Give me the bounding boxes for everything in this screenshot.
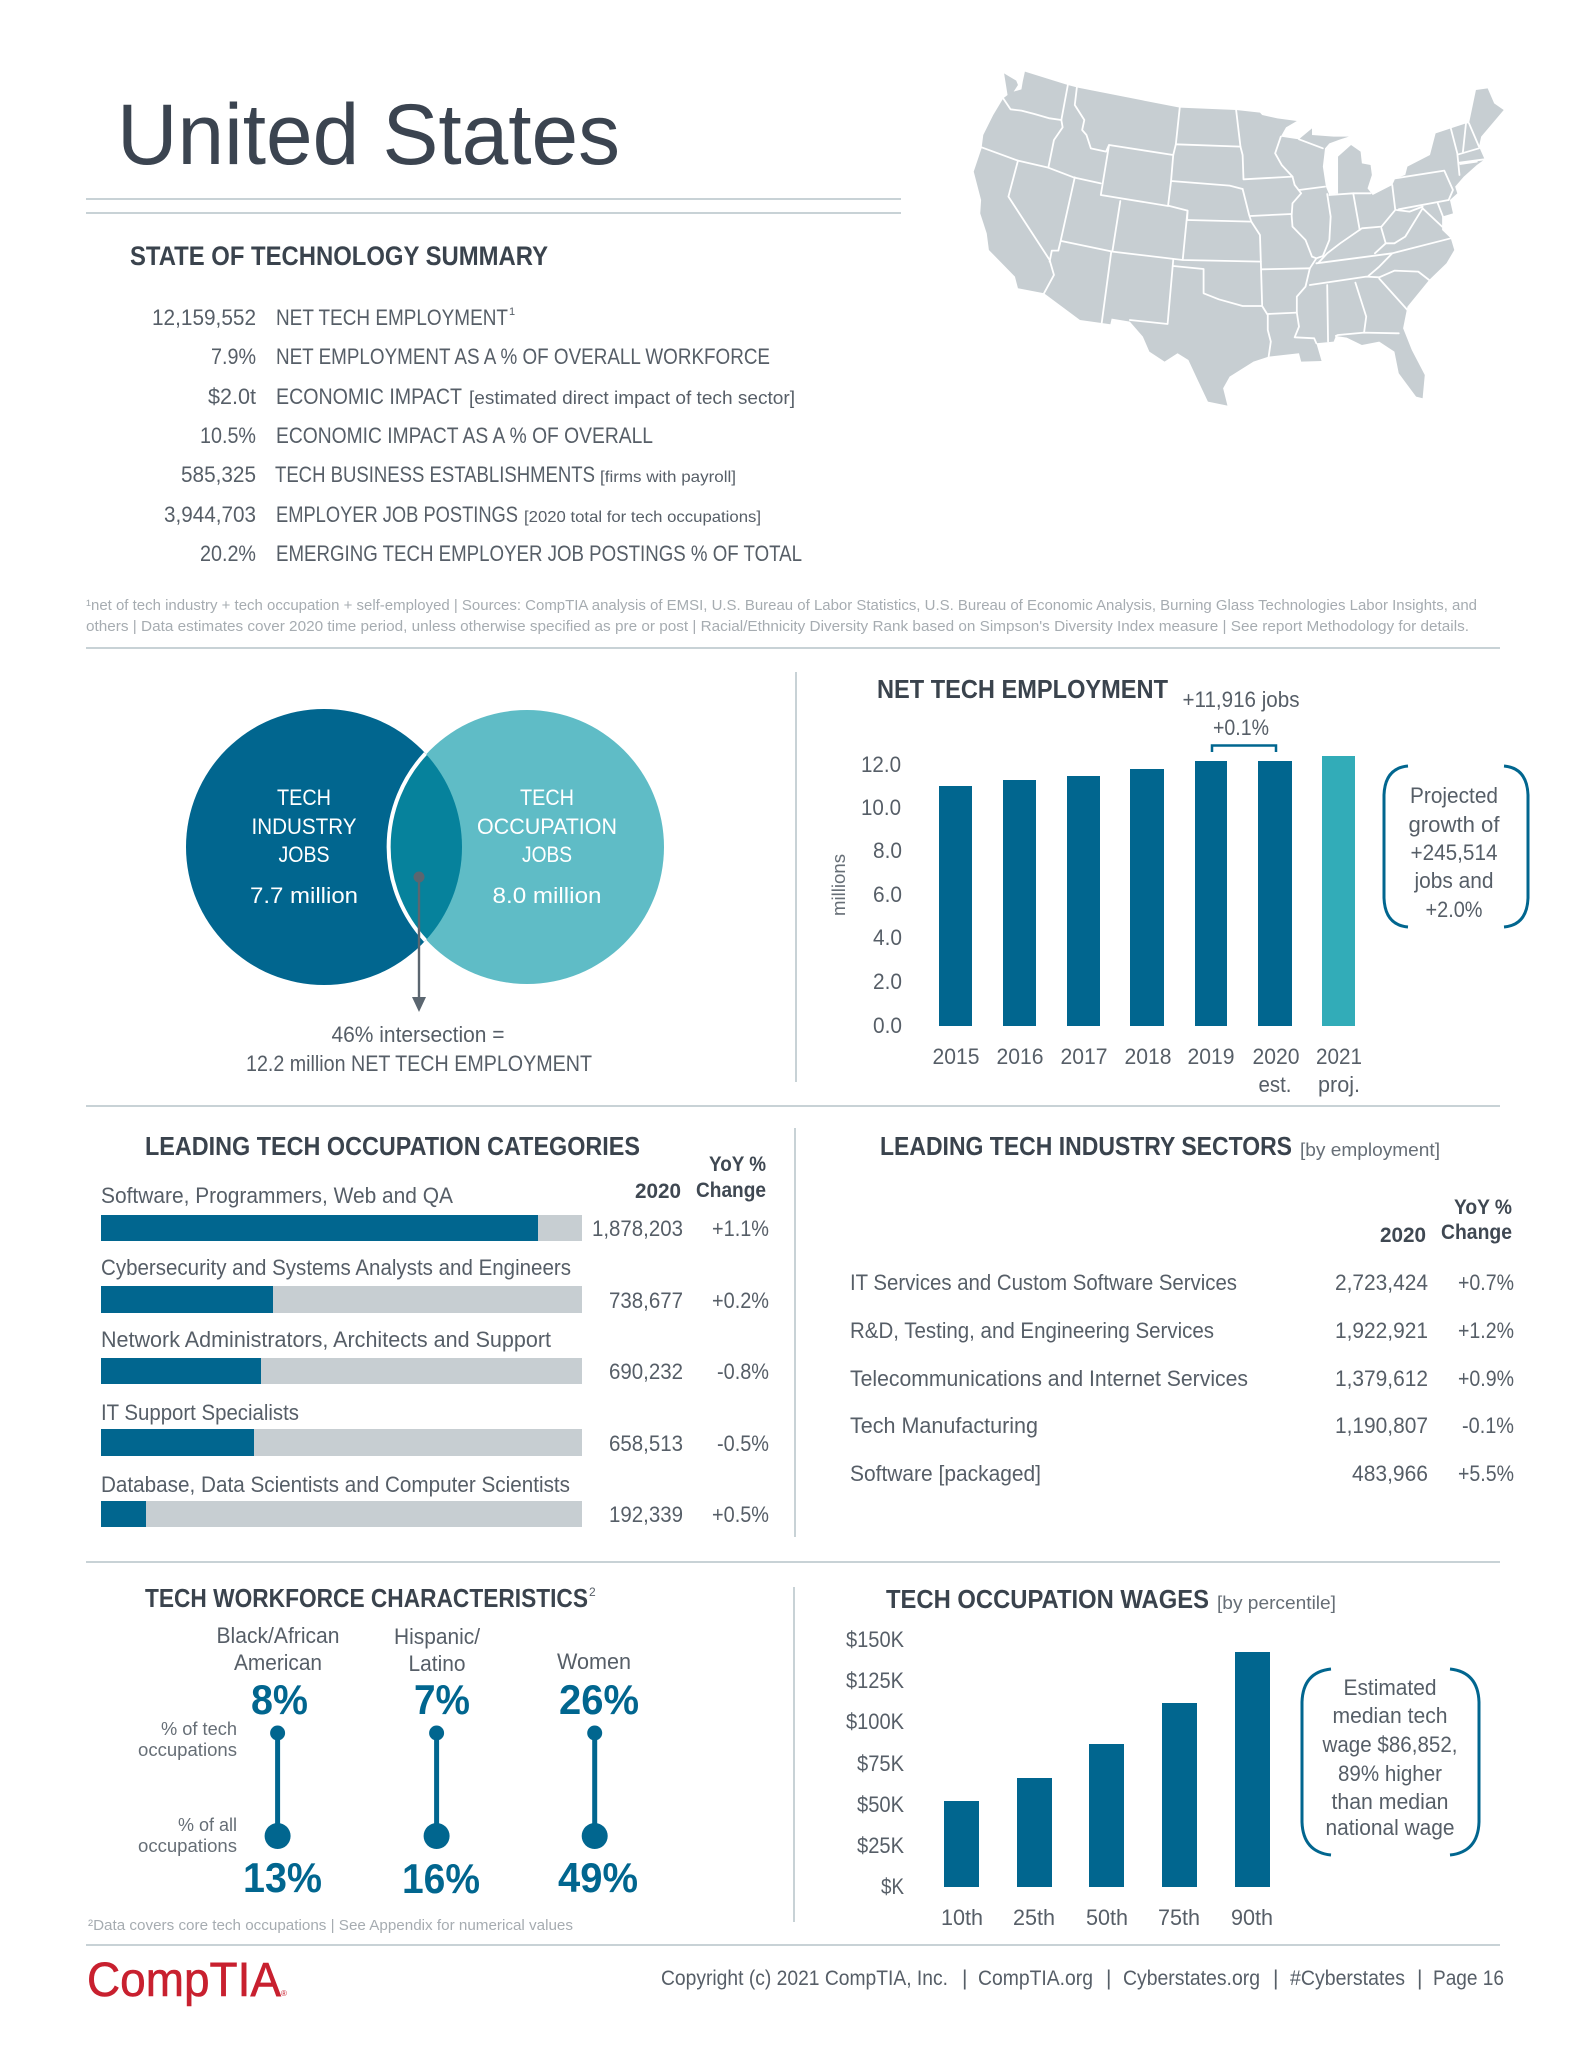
callout: median wage (1302, 1669, 1479, 1855)
x axis: 2015 (932, 1044, 980, 1069)
sector rows: -0.1% (1462, 1413, 1514, 1438)
sector rows: +0.9% (1458, 1366, 1514, 1391)
summary stats list: 12,159,552 (152, 305, 256, 330)
lollipop: hispanic/latino (402, 1676, 480, 1902)
summary stats list (152, 305, 802, 566)
row: network: Network Administrators, Architects and Support (101, 1327, 551, 1352)
column labels: Hispanic/ (394, 1624, 481, 1649)
lollipop: women: 26% (559, 1676, 639, 1723)
footer: copyright: CompTIA.org (978, 1967, 1093, 1990)
callout: median wage: 89% higher (1338, 1761, 1442, 1786)
lollipop: hispanic/latino: 16% (402, 1855, 480, 1902)
sector rows: 1,190,807 (1335, 1413, 1428, 1438)
x axis: 2021 (1316, 1044, 1362, 1069)
heading: workforce characteristics: 2 (589, 1585, 596, 1599)
row: database (101, 1472, 769, 1527)
callout: projected growth: +2.0% (1426, 897, 1482, 922)
footnote: sources (86, 597, 1477, 635)
x axis: 2019 (1188, 1044, 1234, 1069)
x axis (932, 1044, 1362, 1097)
row: cybersecurity: +0.2% (712, 1288, 769, 1313)
row: software: Software, Programmers, Web and QA (101, 1183, 453, 1208)
y axis: 10.0 (861, 795, 901, 820)
row: software (101, 1183, 769, 1241)
summary stats list: 10.5% (200, 423, 256, 448)
x axis: 2018 (1124, 1044, 1172, 1069)
footer: copyright (661, 1967, 1504, 1990)
summary stats list: TECH BUSINESS ESTABLISHMENTS (275, 462, 595, 487)
column labels (216, 1623, 631, 1676)
row: network: 690,232 (609, 1359, 683, 1384)
summary stats list: 20.2% (200, 541, 256, 566)
x axis: 2017 (1060, 1044, 1108, 1069)
column labels: Women (557, 1649, 631, 1674)
x axis: est. (1258, 1072, 1292, 1097)
row: network (101, 1327, 769, 1384)
row: it support: IT Support Specialists (101, 1400, 299, 1425)
y axis: $150K (846, 1627, 904, 1652)
panel: tech occupation wages (846, 1584, 1479, 1930)
y axis: 6.0 (873, 882, 902, 907)
bar chart (944, 1652, 1270, 1887)
summary stats list: $2.0t (208, 384, 256, 409)
intersection caption: 46% intersection = (332, 1022, 504, 1047)
sector rows: 483,966 (1352, 1461, 1428, 1486)
row: software: +1.1% (712, 1216, 769, 1241)
row: database: Database, Data Scientists and Computer Scientists (101, 1472, 570, 1497)
logo: CompTIA: ® (281, 1989, 287, 1998)
callout: projected growth: growth of (1408, 812, 1500, 837)
footnote: sources: ¹net of tech industry + tech occupation + self-employed | Sources: CompTIA analysis of EMSI, U.S. Bureau of Labor Statistics, U.S. Bureau of Economic Analysis, Burning Glass Technologies Labor Insights, and (86, 597, 1477, 614)
heading: net tech employment: NET TECH EMPLOYMENT (877, 674, 1168, 704)
summary stats list: ECONOMIC IMPACT (276, 384, 462, 409)
heading: occupation wages: [by percentile] (1217, 1593, 1336, 1613)
y axis: $K (881, 1874, 904, 1899)
x axis: proj. (1318, 1072, 1360, 1097)
y axis: $125K (846, 1668, 904, 1693)
sector rows: IT Services and Custom Software Services (850, 1270, 1237, 1295)
summary stats list: ECONOMIC IMPACT AS A % OF OVERALL (276, 423, 653, 448)
column headers (1380, 1196, 1512, 1247)
panel: leading tech occupation categories (101, 1131, 769, 1527)
x axis (941, 1905, 1273, 1930)
venn diagram: TECH (277, 785, 331, 810)
y axis: 12.0 (861, 752, 901, 777)
row labels: occupations (138, 1740, 237, 1760)
y axis: 2.0 (873, 969, 902, 994)
column headers: YoY % (709, 1153, 766, 1176)
heading: occupation categories: LEADING TECH OCCUPATION CATEGORIES (145, 1131, 640, 1161)
sector rows: +0.7% (1458, 1270, 1514, 1295)
callout: median wage: median tech (1332, 1703, 1448, 1728)
callout: median wage: than median (1332, 1789, 1448, 1814)
summary stats list: 585,325 (181, 462, 256, 487)
sector rows: R&D, Testing, and Engineering Services (850, 1318, 1214, 1343)
x axis: 75th (1158, 1905, 1200, 1930)
footer: copyright: Copyright (c) 2021 CompTIA, Inc. (661, 1967, 948, 1990)
annotation: yearly change: +0.1% (1213, 715, 1269, 740)
panel: leading tech industry sectors (850, 1131, 1514, 1486)
column headers: 2020 (635, 1180, 681, 1203)
footer: copyright: Cyberstates.org (1123, 1967, 1260, 1990)
venn diagram (186, 709, 664, 985)
column labels: Black/African (216, 1623, 340, 1648)
venn diagram: 8.0 million (492, 883, 602, 908)
y axis: $100K (846, 1709, 904, 1734)
sector rows (850, 1270, 1514, 1486)
venn diagram: INDUSTRY (252, 814, 357, 839)
intersection caption (246, 1022, 592, 1076)
callout: median wage: national wage (1326, 1815, 1454, 1840)
row: database: 192,339 (609, 1502, 683, 1527)
row: it support: -0.5% (717, 1431, 769, 1456)
footer: copyright: | (1273, 1967, 1278, 1990)
column headers: YoY % (1454, 1196, 1512, 1219)
y axis: 0.0 (873, 1013, 902, 1038)
venn diagram: JOBS (522, 842, 572, 867)
lollipop: hispanic/latino: 7% (414, 1676, 470, 1723)
footer: copyright: Page 16 (1433, 1967, 1504, 1990)
callout: projected growth: jobs and (1414, 868, 1494, 893)
summary stats list: 1 (509, 306, 515, 318)
callout: median wage: wage $86,852, (1322, 1732, 1458, 1757)
x axis: 10th (941, 1905, 983, 1930)
y axis: $50K (857, 1792, 904, 1817)
sector rows: Tech Manufacturing (850, 1413, 1038, 1438)
row labels: % of all (178, 1815, 237, 1835)
x axis: 2016 (996, 1044, 1044, 1069)
footer: copyright: | (1417, 1967, 1422, 1990)
summary stats list: [estimated direct impact of tech sector] (469, 388, 795, 408)
y axis: millions (829, 854, 849, 916)
sector rows: Telecommunications and Internet Services (850, 1366, 1248, 1391)
y axis: $25K (857, 1833, 904, 1858)
summary stats list: 3,944,703 (164, 502, 256, 527)
row: software: 1,878,203 (592, 1216, 683, 1241)
row: cybersecurity: Cybersecurity and Systems Analysts and Engineers (101, 1255, 571, 1280)
summary stats list: [2020 total for tech occupations] (524, 509, 761, 526)
lollipop: women (558, 1676, 639, 1901)
lollipop: black/african american (243, 1676, 322, 1901)
lollipop: women: 49% (558, 1854, 638, 1901)
footnote: data coverage: ²Data covers core tech occupations | See Appendix for numerical values (88, 1917, 573, 1934)
row: database: +0.5% (712, 1502, 769, 1527)
heading: occupation wages: TECH OCCUPATION WAGES (886, 1584, 1209, 1614)
heading: workforce characteristics: TECH WORKFORCE CHARACTERISTICS (145, 1583, 588, 1613)
y axis: 4.0 (873, 925, 902, 950)
row: network: -0.8% (717, 1359, 769, 1384)
annotation: yearly change: +11,916 jobs (1182, 687, 1300, 712)
summary stats list: EMERGING TECH EMPLOYER JOB POSTINGS % OF TOTAL (276, 541, 802, 566)
logo: CompTIA: CompTIA (87, 1954, 281, 2007)
y axis (846, 1627, 904, 1899)
y axis: $75K (857, 1751, 904, 1776)
heading: industry sectors: LEADING TECH INDUSTRY SECTORS (880, 1131, 1292, 1161)
sector rows: +5.5% (1458, 1461, 1514, 1486)
sector rows: +1.2% (1458, 1318, 1514, 1343)
panel: net tech employment (829, 674, 1528, 1097)
venn diagram: OCCUPATION (477, 814, 617, 839)
x axis: 90th (1231, 1905, 1273, 1930)
lollipop: black/african american: 13% (243, 1854, 322, 1901)
row labels: occupations (138, 1836, 237, 1856)
heading: industry sectors: [by employment] (1300, 1140, 1440, 1160)
heading: state of technology summary: STATE OF TECHNOLOGY SUMMARY (130, 241, 548, 271)
callout: projected growth: Projected (1410, 783, 1498, 808)
arrow: intersection (412, 872, 426, 1012)
lollipop: black/african american: 8% (251, 1676, 308, 1723)
summary stats list: NET EMPLOYMENT AS A % OF OVERALL WORKFORCE (276, 344, 770, 369)
footer: copyright: | (1106, 1967, 1111, 1990)
summary stats list: [firms with payroll] (600, 469, 736, 486)
summary stats list: 7.9% (211, 344, 256, 369)
x axis: 25th (1013, 1905, 1055, 1930)
title: United States (117, 87, 620, 183)
row: cybersecurity (101, 1255, 769, 1313)
column headers (635, 1153, 766, 1203)
map: contiguous United States (974, 72, 1504, 406)
row labels: % of tech (161, 1719, 237, 1739)
row: it support: 658,513 (609, 1431, 683, 1456)
y axis (829, 752, 902, 1038)
panel: tech workforce characteristics (88, 1583, 639, 1934)
annotation: yearly change (1182, 687, 1300, 752)
callout: projected growth (1384, 766, 1528, 927)
sector rows: Software [packaged] (850, 1461, 1041, 1486)
callout: median wage: Estimated (1344, 1675, 1436, 1700)
sector rows: 2,723,424 (1335, 1270, 1428, 1295)
venn diagram: JOBS (278, 842, 330, 867)
footer: copyright: #Cyberstates (1290, 1967, 1405, 1990)
y axis: 8.0 (873, 838, 902, 863)
footer: copyright: | (962, 1967, 967, 1990)
summary stats list: NET TECH EMPLOYMENT (276, 305, 508, 330)
sector rows: 1,379,612 (1335, 1366, 1428, 1391)
column headers: Change (1441, 1221, 1512, 1244)
venn diagram: TECH (520, 785, 574, 810)
column labels: American (234, 1650, 322, 1675)
venn diagram: 7.7 million (250, 883, 358, 908)
summary stats list: EMPLOYER JOB POSTINGS (276, 502, 518, 527)
callout: projected growth: +245,514 (1410, 840, 1498, 865)
column labels: Latino (408, 1651, 466, 1676)
bar chart (939, 756, 1355, 1026)
column headers: 2020 (1380, 1224, 1426, 1247)
column headers: Change (696, 1179, 766, 1202)
row labels (138, 1719, 237, 1856)
x axis: 50th (1086, 1905, 1128, 1930)
row: cybersecurity: 738,677 (609, 1288, 683, 1313)
sector rows: 1,922,921 (1335, 1318, 1428, 1343)
x axis: 2020 (1252, 1044, 1300, 1069)
row: it support (101, 1400, 769, 1456)
footnote: sources: others | Data estimates cover 2020 time period, unless otherwise specified as pre or post | Racial/Ethnicity Diversity Rank based on Simpson's Diversity Index measure | See report Methodology for details. (86, 618, 1469, 635)
intersection caption: 12.2 million NET TECH EMPLOYMENT (246, 1051, 592, 1076)
